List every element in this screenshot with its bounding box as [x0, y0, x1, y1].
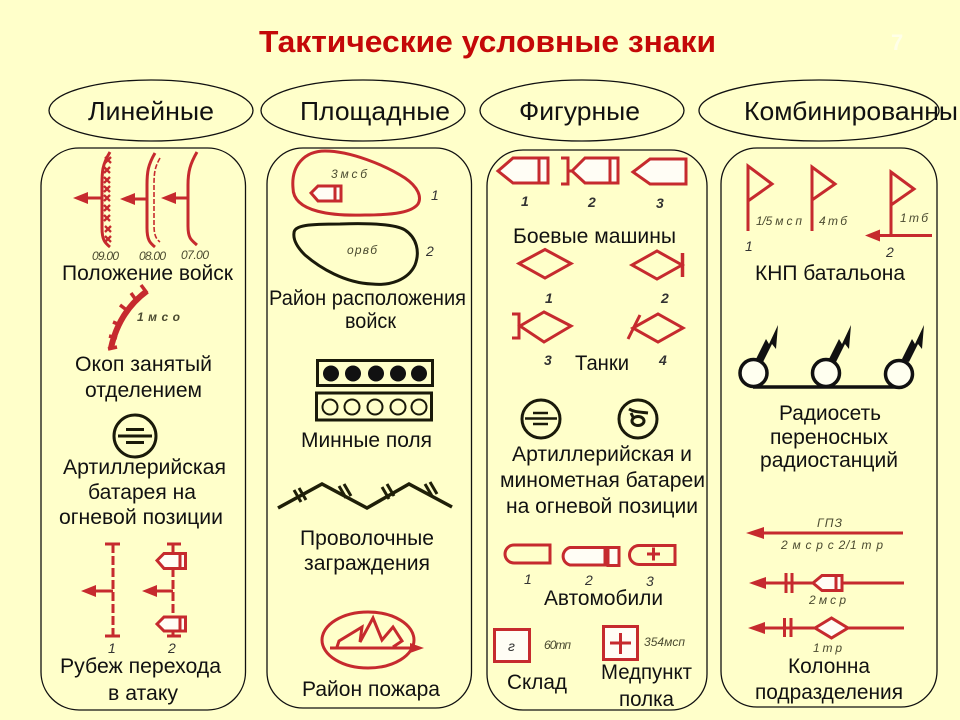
icon: automobiles: 3 — [646, 573, 654, 589]
icon: artillery battery — [114, 415, 156, 457]
label: batteries — [500, 442, 705, 518]
label: portable radio network: Радиосеть — [779, 401, 881, 425]
icon: tanks — [512, 250, 683, 368]
heading: linear — [49, 80, 253, 141]
category headings — [49, 80, 958, 141]
label: attack line: Рубеж перехода — [60, 654, 221, 678]
heading: area — [261, 80, 465, 141]
icon: troop positions: 09.00 — [92, 249, 119, 263]
label: attack line — [60, 654, 221, 705]
label: batteries: на огневой позиции — [506, 494, 698, 518]
label: warehouse: Склад — [507, 670, 567, 694]
icon: warehouse — [494, 630, 571, 662]
label: artillery battery: огневой позиции — [59, 505, 223, 529]
panel: figure signs — [487, 150, 707, 711]
icon: battalion command post flags: 4 т б — [819, 214, 848, 228]
icon: column routes: 2 м с р с 2/1 т р — [780, 538, 883, 552]
icon: automobiles — [505, 545, 675, 589]
icon: black troop area: о р в б — [347, 243, 378, 257]
label: artillery battery: батарея на — [88, 480, 196, 504]
slide number: 7 — [891, 30, 903, 55]
title: Тактические условные знаки — [259, 24, 716, 59]
label: fire area: Район пожара — [302, 677, 440, 701]
label: column — [755, 654, 903, 704]
heading: figure — [480, 80, 684, 141]
icon: combat vehicles: 3 — [656, 195, 664, 211]
icon: wire obstacles — [278, 482, 452, 508]
label: minefields: Минные поля — [301, 428, 432, 452]
label: portable radio network: переносных — [770, 425, 888, 449]
icon: column routes — [746, 516, 904, 655]
heading: linear: Линейные — [88, 96, 214, 126]
icon: attack line 2 — [142, 544, 186, 656]
label: wire obstacles: заграждения — [304, 551, 430, 575]
label: troop area — [269, 286, 466, 333]
icon: attack line 1 — [81, 544, 120, 656]
label: regimental aid post: полка — [619, 687, 674, 711]
icon: red troop area — [293, 151, 439, 215]
label: wire obstacles: Проволочные — [300, 526, 434, 550]
icon: column routes: 2 м с р — [808, 593, 846, 607]
panel: area signs — [267, 148, 472, 708]
icon: combat vehicles — [498, 158, 686, 211]
icon: artillery and mortar batteries — [522, 400, 657, 438]
icon: tanks: 2 — [660, 290, 669, 306]
label: artillery battery — [59, 455, 226, 529]
heading: area: Площадные — [300, 96, 450, 126]
icon: black troop area: 2 — [425, 243, 434, 259]
label: combat vehicles: Боевые машины — [513, 224, 676, 248]
icon: tanks: 1 — [545, 290, 553, 306]
label: batteries: Артиллерийская и — [512, 442, 692, 466]
icon: automobiles: 2 — [584, 572, 593, 588]
icon: column routes: Г П З — [817, 516, 843, 530]
icon: portable radio network — [740, 325, 924, 388]
label: attack line: в атаку — [108, 681, 178, 705]
label: tanks: Танки — [575, 351, 629, 375]
icon: red troop area: 3 м с б — [331, 167, 368, 181]
icon: combat vehicles: 1 — [521, 193, 529, 209]
icon: troop positions: 07.00 — [181, 248, 209, 262]
icon: regimental aid post: 3 5 4 м с п — [644, 635, 685, 649]
icon: tanks: 3 — [544, 352, 552, 368]
label: wire obstacles — [300, 526, 434, 575]
icon: attack line 2: 2 — [167, 640, 176, 656]
icon: black troop area — [294, 224, 434, 284]
label: occupied trench — [75, 352, 212, 402]
icon: battalion command post flags: 2 — [885, 244, 894, 260]
label: regimental aid post: Медпункт — [601, 660, 692, 684]
panel: combined signs — [721, 148, 937, 707]
label: portable radio network: радиостанций — [760, 448, 898, 472]
icon: battalion command post flags: 1 т б — [900, 211, 929, 225]
heading: combined: Комбинированны — [744, 96, 958, 126]
icon: fire area — [322, 612, 424, 668]
panel: linear signs — [41, 148, 246, 710]
icon: troop positions — [73, 152, 209, 263]
icon: warehouse: 6 0 т п — [544, 638, 571, 652]
icon: occupied trench — [108, 285, 180, 349]
icon: warehouse: г — [508, 638, 515, 654]
icon: battalion command post flags: 1/5 м с п — [756, 214, 802, 228]
label: column: Колонна — [788, 654, 870, 678]
heading: combined — [699, 80, 958, 141]
label: troop positions: Положение войск — [62, 261, 234, 285]
icon: regimental aid post — [604, 626, 685, 660]
icon: battalion command post flags: 1 — [745, 238, 753, 254]
label: battalion command post: КНП батальона — [755, 261, 905, 285]
label: troop area: Район расположения — [269, 286, 466, 310]
icon: attack line 1: 1 — [108, 640, 116, 656]
label: portable radio network — [760, 401, 898, 472]
icon: tanks: 4 — [658, 352, 667, 368]
label: regimental aid post — [601, 660, 692, 711]
heading: figure: Фигурные — [519, 96, 640, 126]
icon: column routes: 1 т р — [813, 641, 842, 655]
icon: troop positions: 08.00 — [139, 249, 166, 263]
icon: automobiles: 1 — [524, 571, 532, 587]
label: batteries: минометная батареи — [500, 468, 705, 492]
label: occupied trench: отделением — [85, 378, 202, 402]
icon: battalion command post flags — [745, 166, 932, 260]
icon: combat vehicles: 2 — [587, 194, 596, 210]
icon: occupied trench: 1 м с о — [137, 310, 180, 324]
label: column: подразделения — [755, 680, 903, 704]
label: troop area: войск — [345, 309, 397, 333]
label: artillery battery: Артиллерийская — [63, 455, 226, 479]
label: automobiles: Автомобили — [544, 586, 663, 610]
label: occupied trench: Окоп занятый — [75, 352, 212, 376]
icon: minefields — [316, 360, 432, 420]
icon: red troop area: 1 — [431, 187, 439, 203]
